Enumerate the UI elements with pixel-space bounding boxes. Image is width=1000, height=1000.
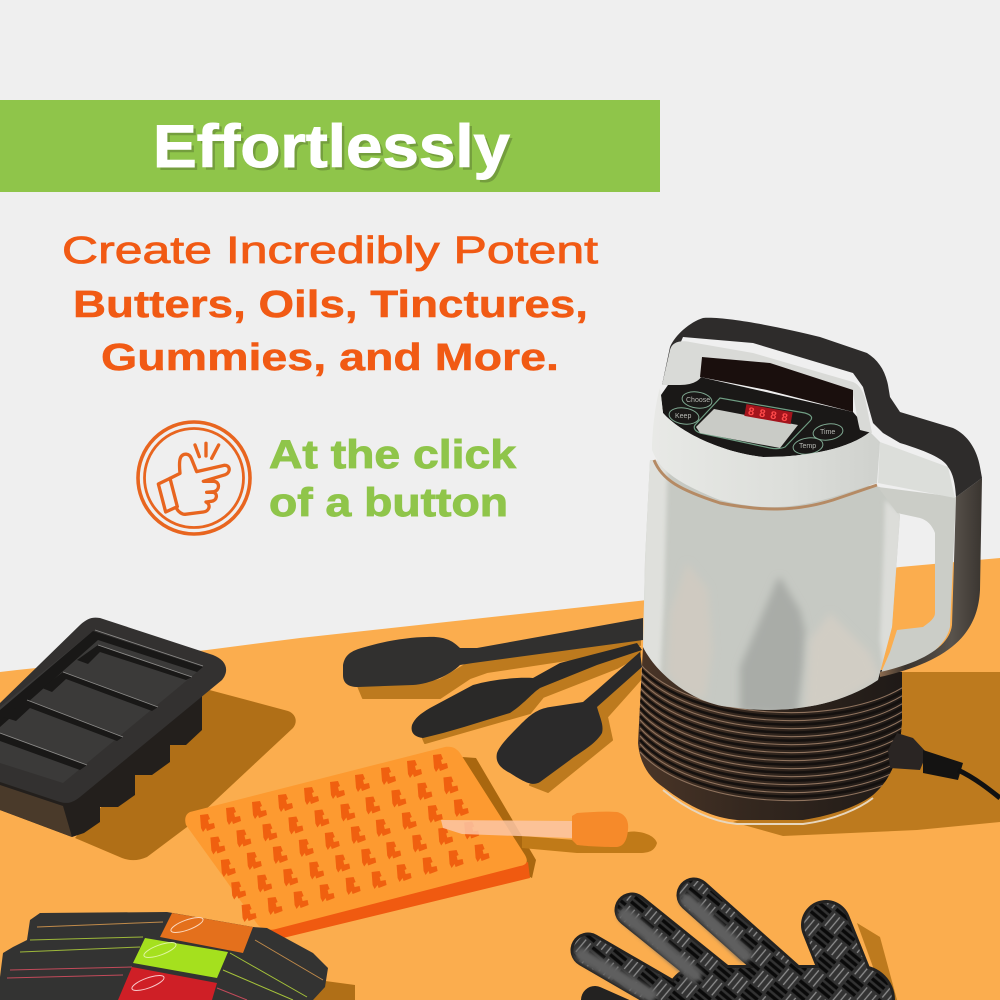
kettle black lid — [662, 318, 982, 497]
banner heading: Effortlessly — [156, 116, 514, 183]
narrow spatula — [412, 643, 642, 738]
banner — [0, 100, 660, 192]
glove fingers — [588, 895, 860, 1000]
kettle black handle band — [880, 478, 982, 677]
glove shadow — [857, 923, 897, 1000]
gummy mold edge — [185, 820, 530, 938]
kettle handle join — [878, 442, 955, 498]
gummy cavities — [200, 754, 490, 922]
kettle buttons — [668, 390, 844, 456]
kettle gold band — [654, 460, 877, 509]
spoon spatula — [343, 618, 643, 687]
glove grip texture — [588, 895, 860, 1000]
dropper shadow — [522, 832, 657, 853]
gummy mold top — [185, 747, 527, 930]
wide spatula — [497, 652, 642, 784]
gummy mold shadow — [462, 757, 536, 878]
kettle buttons: Time — [820, 429, 835, 436]
kettle handle — [878, 487, 956, 675]
gummy mold — [185, 747, 536, 938]
kettle body — [640, 450, 903, 715]
dropper bulb — [572, 812, 628, 847]
strainer bags — [0, 912, 355, 1000]
bag stitching — [7, 922, 323, 1000]
red tag — [118, 967, 217, 1000]
icon: snapping fingers — [138, 422, 250, 534]
oven glove — [582, 895, 897, 1000]
butter mold — [0, 618, 226, 837]
kettle ribbed base — [638, 647, 905, 824]
mold highlights — [0, 630, 203, 765]
orange tag — [160, 913, 253, 953]
kettle handle window — [700, 357, 853, 412]
kettle carry handle — [662, 341, 872, 433]
kettle buttons: Keep — [675, 413, 691, 420]
shadow: spatulas — [358, 635, 640, 792]
green call to action text — [269, 433, 517, 525]
mold recess — [0, 631, 203, 783]
green tag — [133, 938, 228, 978]
bags fabric — [0, 912, 328, 1000]
table surface — [0, 558, 1000, 1000]
kettle — [638, 318, 1000, 824]
power plug — [888, 733, 1000, 798]
mold cavities — [0, 631, 203, 770]
mold body — [0, 695, 202, 837]
glove smooth highlights — [582, 900, 745, 995]
kettle display — [694, 398, 812, 449]
orange headline text: Butters, Oils, Tinctures, — [73, 284, 588, 326]
kettle buttons: Temp — [799, 443, 816, 450]
green call to action text: At the click — [269, 433, 517, 477]
orange headline text: Gummies, and More. — [101, 337, 559, 379]
orange headline text: Create Incredibly Potent — [62, 230, 599, 272]
dropper glass — [441, 820, 572, 838]
banner heading: Effortlessly — [153, 113, 511, 180]
shadow: kettle — [733, 672, 1000, 836]
kettle display: 8888 — [747, 406, 789, 424]
green call to action text: of a button — [269, 481, 508, 525]
kettle control panel — [661, 377, 870, 457]
kettle buttons: Choose — [686, 397, 710, 404]
dropper — [441, 812, 657, 853]
shadow: butter mold — [75, 688, 296, 860]
mold top rim — [0, 618, 226, 803]
bags shadow — [310, 980, 355, 1000]
orange headline text — [62, 230, 599, 379]
kettle rim — [652, 388, 880, 507]
